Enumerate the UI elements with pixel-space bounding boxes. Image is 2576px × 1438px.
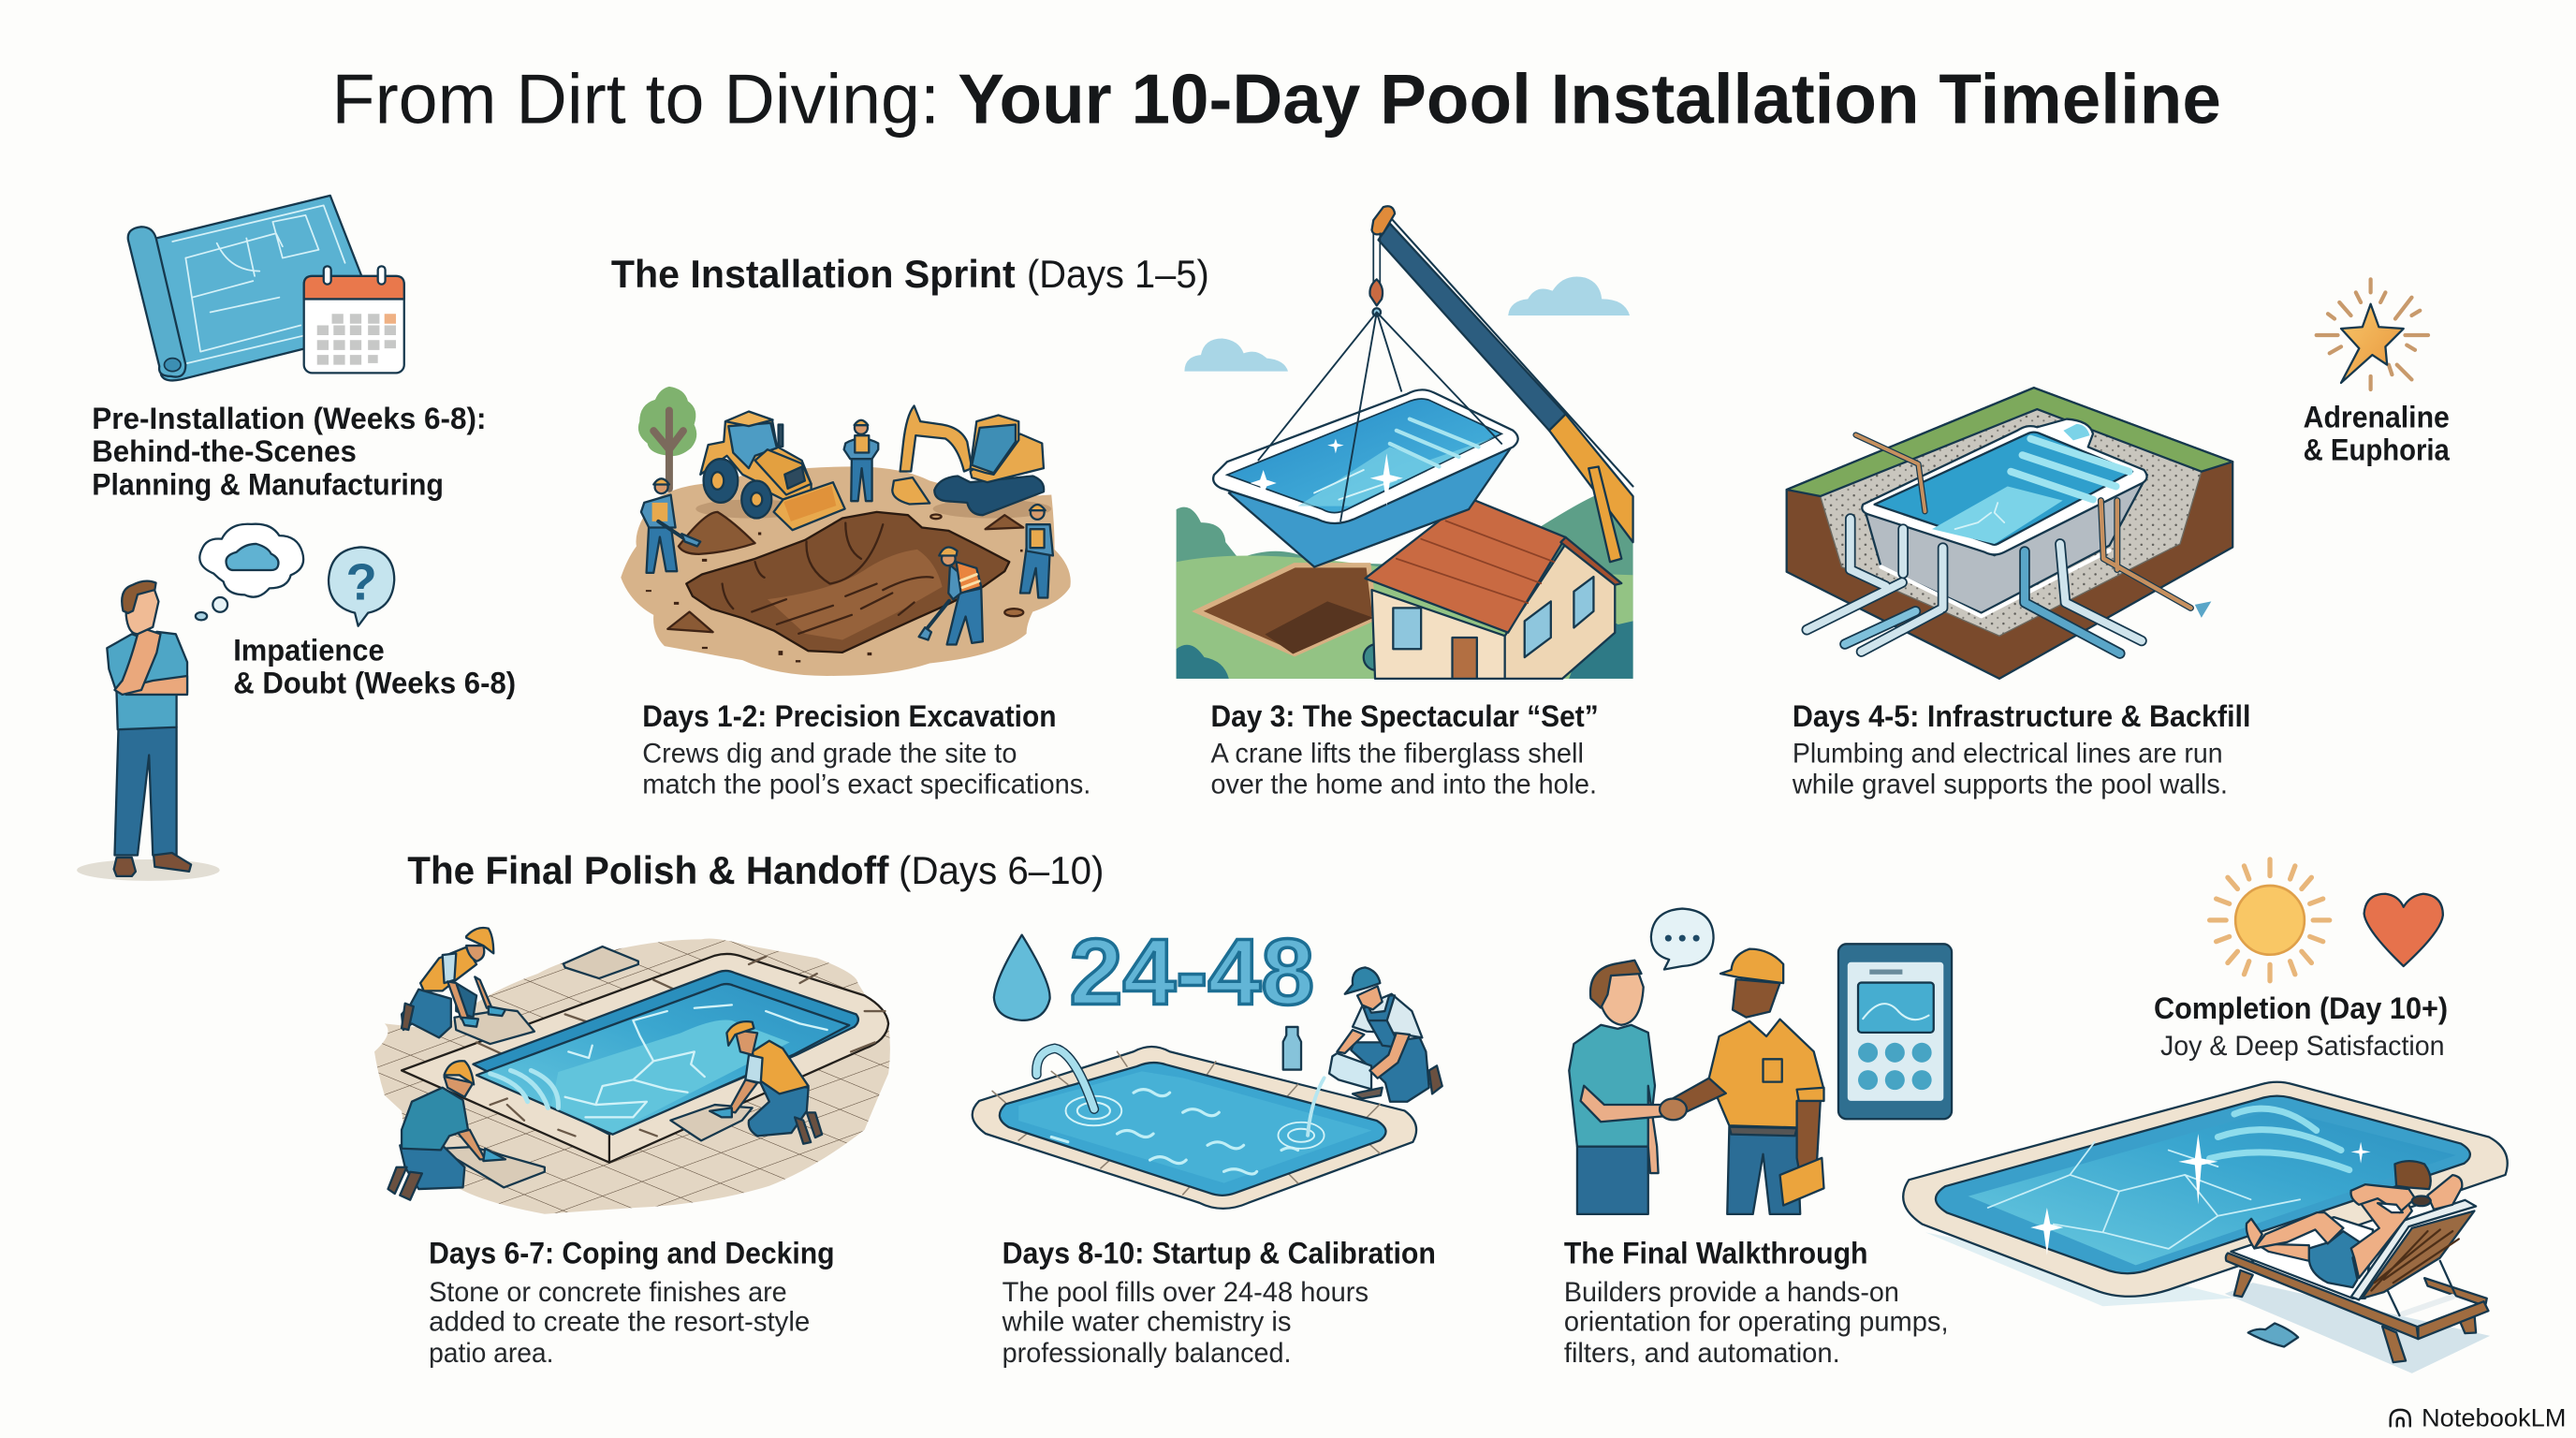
icon: worker bottom-left bbox=[388, 1061, 545, 1200]
icon: builder bbox=[1660, 949, 1823, 1214]
icon: worker top-left bbox=[402, 928, 534, 1044]
label: completion bbox=[2154, 991, 2448, 1062]
label: adrenaline bbox=[2304, 400, 2451, 466]
text: days 6-7: Days 6-7: Coping and Decking bbox=[429, 1237, 835, 1270]
title: Your 10-Day Pool Installation Timeline bbox=[958, 60, 2221, 139]
label: adrenaline: Adrenaline bbox=[2304, 400, 2450, 433]
text: days 4-5 bbox=[1792, 699, 2250, 800]
icon: excavator bbox=[892, 406, 1044, 515]
heading: pre-installation: Planning & Manufacturing bbox=[92, 467, 444, 501]
icon: water pipes bbox=[1807, 519, 2142, 653]
icon: calendar bbox=[304, 266, 404, 373]
panel: final walkthrough bbox=[1564, 909, 1952, 1369]
icon: homeowner bbox=[1569, 961, 1668, 1214]
icon: worker right bbox=[670, 1021, 822, 1144]
label: completion: Completion (Day 10+) bbox=[2154, 991, 2448, 1025]
panel: days 8-10 startup bbox=[973, 919, 1442, 1369]
icon: cloud right bbox=[1508, 276, 1630, 315]
label: impatience and doubt bbox=[233, 634, 516, 700]
panel: days 1-2 excavation bbox=[621, 387, 1090, 800]
text: day 3: over the home and into the hole. bbox=[1211, 770, 1597, 800]
icon: house bbox=[1365, 498, 1621, 679]
text: days 8-10 bbox=[1002, 1237, 1436, 1369]
icon: digging worker bbox=[919, 548, 983, 645]
icon: standing foreman bbox=[844, 420, 878, 501]
illustration: excavation site bbox=[621, 387, 1071, 676]
text: days 1-2: Days 1-2: Precision Excavation bbox=[642, 699, 1057, 733]
panel: pre-installation bbox=[92, 196, 487, 501]
label: impatience and doubt: Impatience bbox=[233, 634, 385, 668]
text: final walkthrough: orientation for operating pumps, bbox=[1564, 1307, 1949, 1338]
title: From Dirt to Diving: bbox=[332, 60, 940, 139]
text: days 8-10: professionally balanced. bbox=[1003, 1338, 1292, 1369]
panel: days 6-7 coping bbox=[374, 928, 890, 1369]
text: days 4-5: while gravel supports the pool walls. bbox=[1792, 770, 2228, 800]
icon: heart bbox=[2364, 894, 2443, 966]
illustration: finished pool with lounger bbox=[1903, 1082, 2508, 1373]
icon: blueprint roll bbox=[128, 196, 368, 380]
text: days 4-5: Plumbing and electrical lines are run bbox=[1793, 738, 2223, 769]
scene: backyard bbox=[1177, 493, 1633, 679]
text: days 8-10: Days 8-10: Startup & Calibration bbox=[1003, 1237, 1436, 1270]
text: final walkthrough bbox=[1564, 1237, 1949, 1369]
icon: star burst bbox=[2317, 279, 2428, 389]
icon: loose paver bbox=[564, 946, 638, 978]
text: days 1-2: Crews dig and grade the site to bbox=[642, 738, 1017, 769]
text: days 4-5: Days 4-5: Infrastructure & Backfill bbox=[1793, 699, 2250, 733]
illustration: crane lifting shell over house bbox=[1177, 206, 1633, 679]
icon: right worker bbox=[1020, 505, 1053, 598]
text: days 6-7: added to create the resort-style bbox=[429, 1307, 810, 1338]
icon: worker pouring bbox=[1329, 967, 1442, 1102]
panel: days 4-5 infrastructure bbox=[1787, 388, 2250, 800]
logo: NotebookLM: NotebookLM bbox=[2422, 1402, 2566, 1431]
text: day 3 bbox=[1211, 699, 1599, 800]
icon: copper pipes bbox=[1856, 435, 2211, 618]
label: impatience and doubt: & Doubt (Weeks 6-8) bbox=[233, 667, 516, 700]
illustration: pool filling bbox=[973, 1047, 1416, 1209]
icon: sun lounger with man bbox=[2225, 1161, 2490, 1373]
icon: question bubble bbox=[329, 547, 394, 626]
text: days 6-7: patio area. bbox=[429, 1338, 553, 1369]
panel: adrenaline and euphoria bbox=[2304, 279, 2451, 466]
text: day 3: Day 3: The Spectacular “Set” bbox=[1211, 699, 1599, 733]
number: 24-48: 24-48 bbox=[1070, 919, 1314, 1024]
icon: wheel loader bbox=[700, 412, 845, 530]
icon: crane boom bbox=[1369, 206, 1633, 562]
icon: tablet bbox=[1838, 944, 1952, 1119]
icon: chemical bottle bbox=[1283, 1027, 1301, 1070]
illustration: pool cross-section bbox=[1787, 388, 2232, 679]
icon: cloud left bbox=[1184, 339, 1288, 372]
icon: thought bubble bbox=[196, 524, 303, 620]
icon: fill spout bbox=[1036, 1049, 1094, 1109]
text: final walkthrough: The Final Walkthrough bbox=[1564, 1237, 1868, 1270]
text: days 1-2: match the pool’s exact specifications. bbox=[642, 770, 1090, 800]
heading: the installation sprint: (Days 1–5) bbox=[1027, 253, 1209, 296]
heading: the final polish: (Days 6–10) bbox=[899, 849, 1104, 892]
title bbox=[332, 60, 2221, 139]
icon: sun bbox=[2210, 859, 2330, 981]
icon: question bubble: ? bbox=[346, 554, 377, 611]
heading: pre-installation: Pre-Installation (Weeks 6-8): bbox=[92, 402, 487, 435]
icon: left worker with shovel bbox=[641, 478, 700, 573]
text: final walkthrough: filters, and automation. bbox=[1564, 1338, 1840, 1369]
icon: water drop bbox=[994, 935, 1050, 1020]
icon: tree bbox=[638, 387, 696, 489]
label: adrenaline: & Euphoria bbox=[2304, 433, 2451, 466]
panel: impatience and doubt bbox=[77, 524, 516, 881]
label: completion: Joy & Deep Satisfaction bbox=[2160, 1031, 2445, 1062]
text: days 6-7: Stone or concrete finishes are bbox=[429, 1277, 787, 1308]
text: days 8-10: while water chemistry is bbox=[1002, 1307, 1292, 1338]
text: day 3: A crane lifts the fiberglass shell bbox=[1211, 738, 1584, 769]
icon: lifting ropes bbox=[1258, 312, 1501, 521]
text: days 6-7 bbox=[429, 1237, 835, 1369]
icon: fiberglass pool shell bbox=[1213, 389, 1518, 567]
panel: completion bbox=[1903, 859, 2508, 1373]
panel: day 3 crane set bbox=[1177, 206, 1633, 800]
heading: the final polish: The Final Polish & Handoff bbox=[407, 849, 889, 892]
text: days 8-10: The pool fills over 24-48 hours bbox=[1003, 1277, 1368, 1308]
icon: thinking man bbox=[77, 581, 220, 881]
illustration: coping and decking bbox=[374, 928, 890, 1214]
text: days 1-2 bbox=[642, 699, 1090, 800]
heading: pre-installation: Behind-the-Scenes bbox=[92, 434, 357, 468]
heading: the installation sprint: The Installation Sprint bbox=[611, 253, 1016, 296]
icon: chemical pour bbox=[1308, 1078, 1325, 1136]
heading: the installation sprint bbox=[611, 253, 1209, 296]
heading: pre-installation bbox=[92, 402, 487, 501]
icon: speech bubble bbox=[1651, 909, 1714, 970]
text: final walkthrough: Builders provide a hands-on bbox=[1564, 1277, 1899, 1308]
